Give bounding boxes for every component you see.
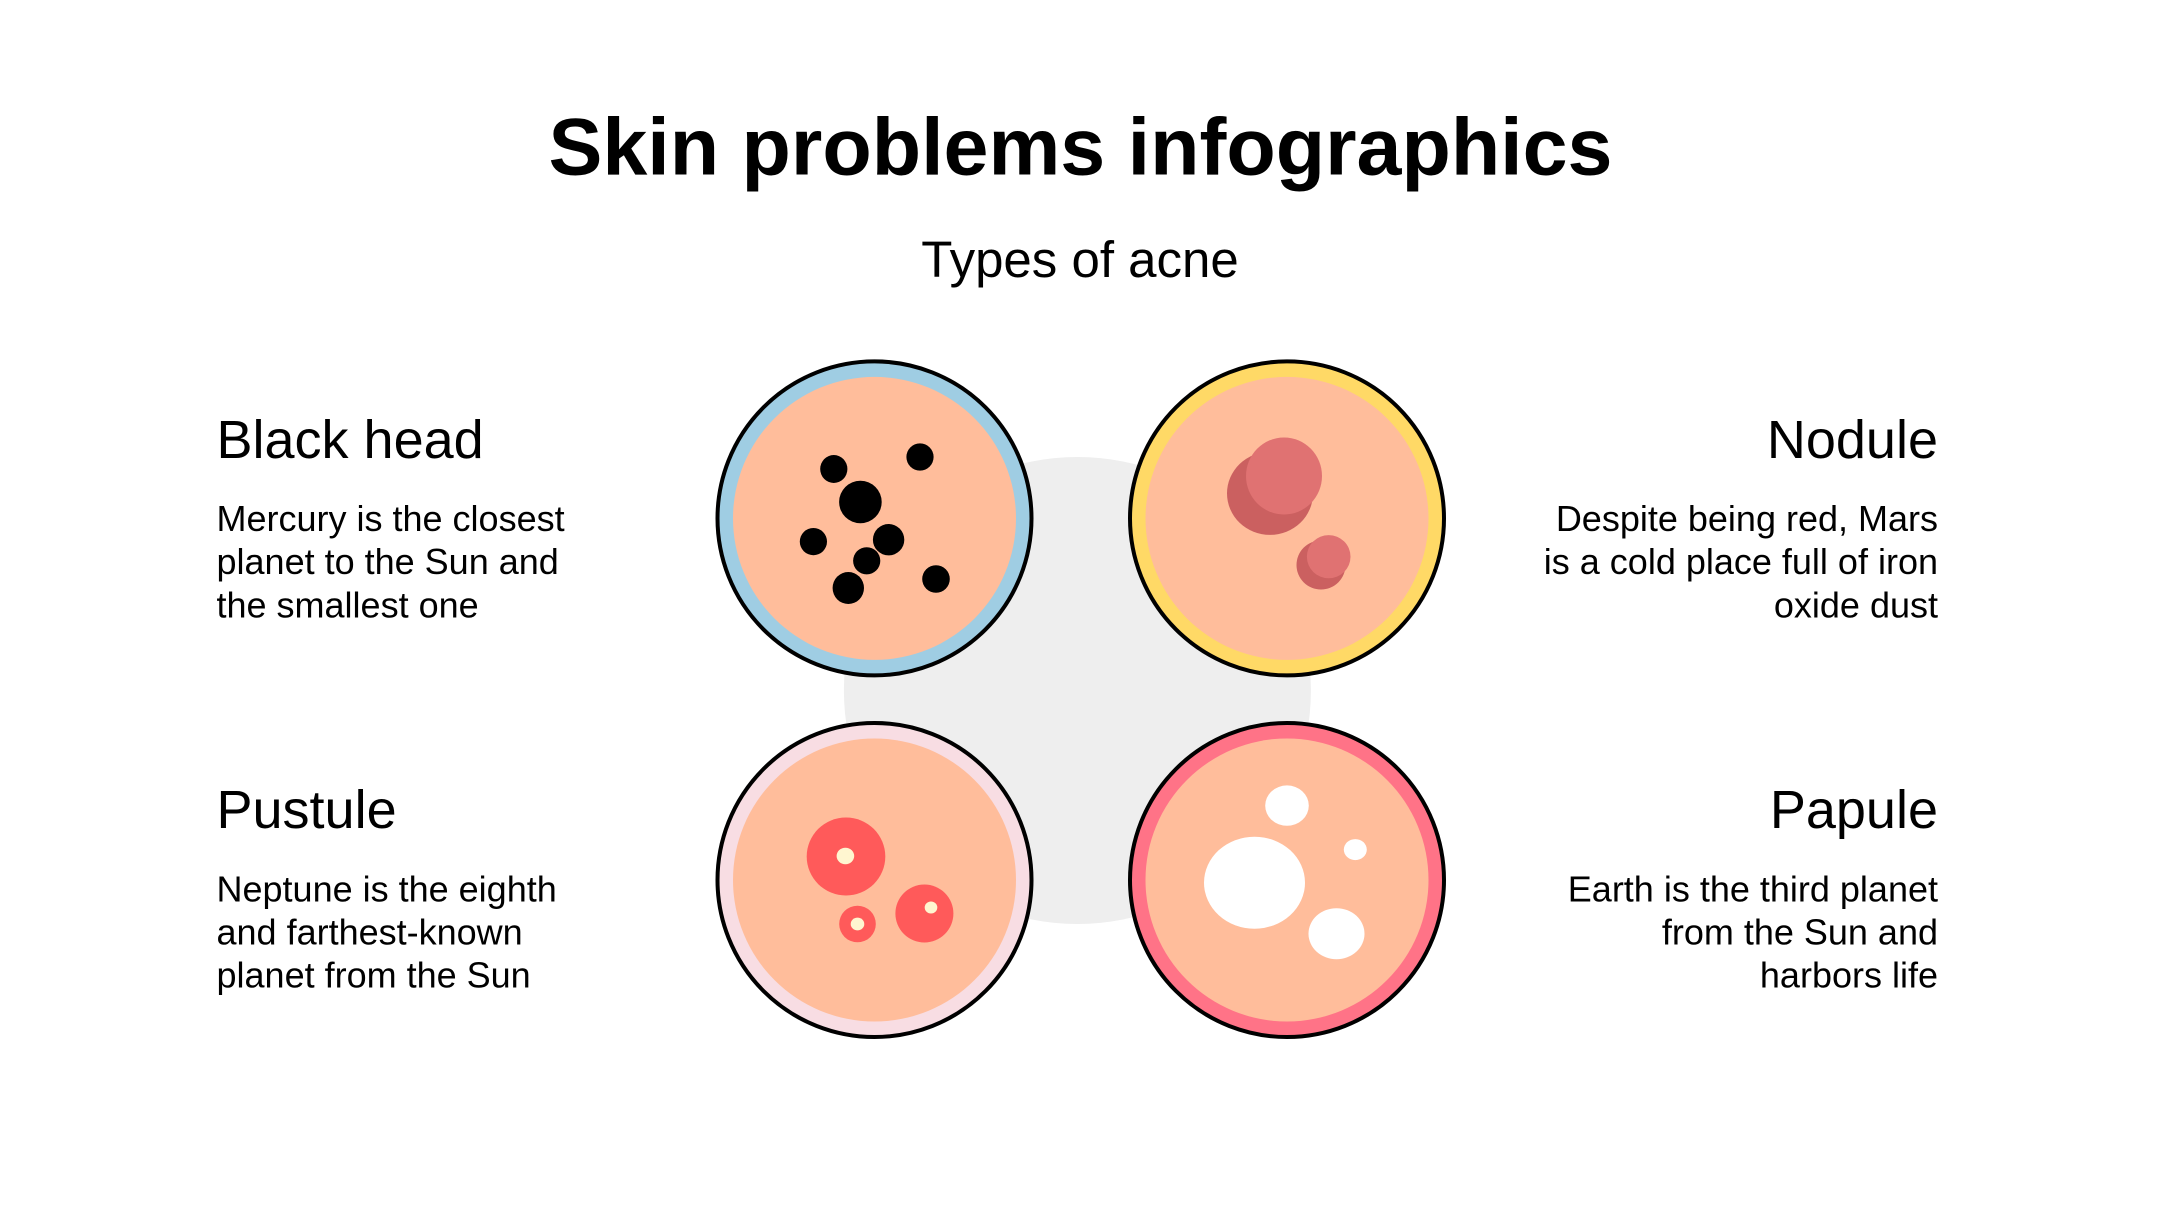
text: papule description: Earth is the third planet <box>1568 868 1938 909</box>
text: pustule description: planet from the Sun <box>216 955 531 996</box>
text: pustule description: Neptune is the eighth <box>216 868 557 909</box>
heading: papule: Papule <box>1770 780 1938 840</box>
text: papule description: from the Sun and <box>1662 912 1938 952</box>
text: papule description: harbors life <box>1760 955 1938 996</box>
text: pustule description: and farthest-known <box>216 912 523 952</box>
icon: pustule skin circle <box>718 723 1032 1037</box>
text: nodule description: oxide dust <box>1774 584 1938 625</box>
text: black head description: the smallest one <box>216 584 479 625</box>
text: black head description: planet to the Sun and <box>216 541 559 582</box>
background grey circle <box>844 457 1311 924</box>
text: nodule description: is a cold place full of iron <box>1544 541 1938 582</box>
subtitle: Types of acne <box>921 231 1239 288</box>
icon: nodule skin circle <box>1130 361 1444 675</box>
heading: nodule: Nodule <box>1767 410 1938 470</box>
title: Skin problems infographics <box>548 102 1613 192</box>
heading: pustule: Pustule <box>216 780 397 840</box>
text: nodule description: Despite being red, Mars <box>1556 498 1938 539</box>
heading: black head: Black head <box>216 410 484 470</box>
text: black head description: Mercury is the closest <box>216 498 565 539</box>
icon: black head skin circle <box>718 361 1032 675</box>
icon: papule skin circle <box>1130 723 1444 1037</box>
